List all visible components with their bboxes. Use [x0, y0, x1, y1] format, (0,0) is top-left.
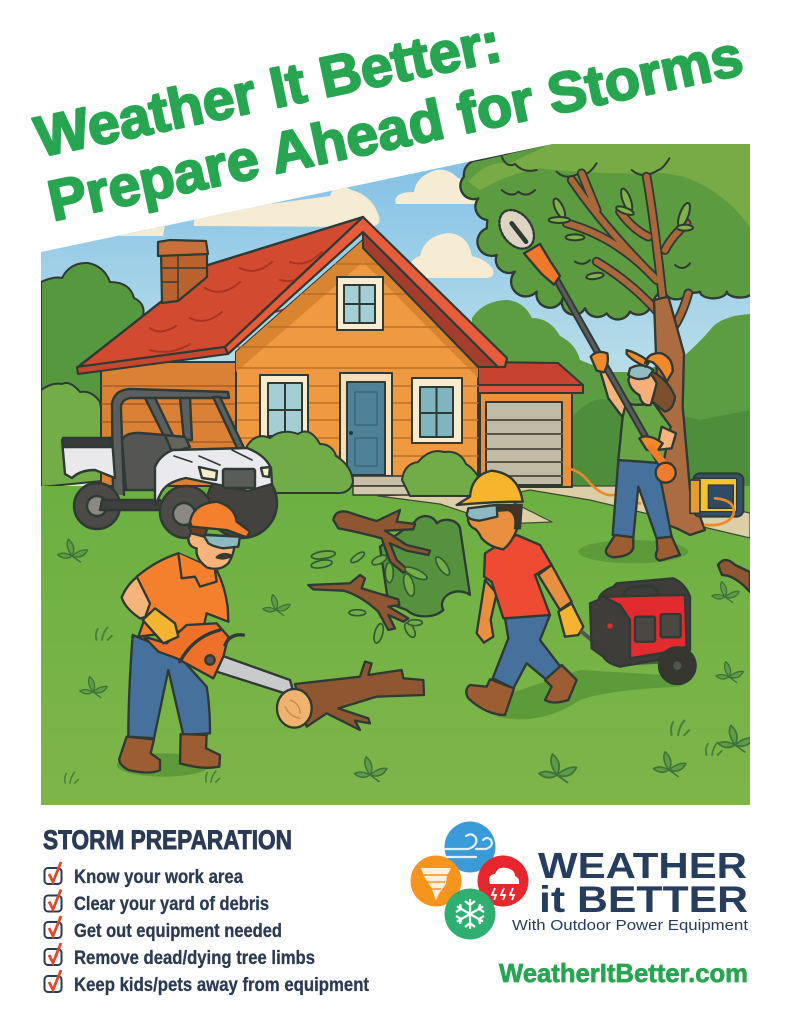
saw pole [557, 280, 663, 468]
bush by door right [402, 451, 482, 496]
face [188, 533, 234, 569]
legs [613, 460, 672, 538]
generator vents [635, 617, 655, 642]
check item 2: Clear your yard of debris [74, 894, 269, 915]
generator body [590, 578, 690, 667]
storm preparation checklist [43, 825, 370, 996]
lawn [41, 486, 750, 806]
check item 3: Get out equipment needed [74, 921, 282, 942]
shirt [618, 403, 671, 463]
hat [627, 350, 673, 382]
collar [178, 553, 217, 587]
check item 3 [44, 916, 282, 942]
icon: snowflake [444, 888, 496, 940]
grille [223, 469, 255, 488]
glove [558, 603, 583, 637]
legs [128, 635, 210, 738]
background bush front left [41, 382, 100, 486]
shirt [137, 553, 228, 637]
bush by door left [247, 432, 353, 493]
face [468, 505, 518, 549]
left window [260, 375, 308, 437]
canopy [460, 137, 753, 319]
far front tire [207, 468, 277, 538]
garage door [486, 402, 562, 485]
chainsaw body [144, 623, 228, 678]
sky [41, 144, 750, 489]
check item 1: Know your work area [74, 867, 243, 888]
headlights [199, 467, 270, 480]
shadow [497, 670, 693, 719]
front wall [236, 240, 478, 486]
hard hat [457, 471, 523, 505]
check item 4: Remove dead/dying tree limbs [74, 948, 315, 969]
mustache [217, 554, 232, 558]
trunk [654, 297, 705, 535]
tree with canopy [460, 137, 753, 535]
generator wheel [659, 647, 696, 684]
check item 4 [44, 943, 315, 969]
goggles [628, 365, 653, 379]
gable red trim [225, 217, 507, 367]
icon: tornado [410, 856, 462, 906]
left arm [477, 580, 497, 643]
check item 5 [44, 970, 370, 996]
background foliage lower [573, 399, 750, 486]
front tire [160, 486, 212, 538]
canopy highlight [468, 144, 750, 228]
icon: wind [444, 822, 496, 872]
UTV vehicle [62, 389, 277, 538]
lower left wall [101, 362, 237, 486]
lower arm [657, 427, 676, 450]
boots [466, 665, 577, 715]
hair [497, 505, 522, 528]
gloves [591, 352, 663, 451]
front door [340, 373, 392, 476]
man with generator [457, 471, 696, 719]
illustration: yard scene [41, 137, 753, 806]
title: Prepare Ahead for Storms [42, 24, 748, 234]
logo wordmark: WEATHER [538, 845, 747, 886]
logo icons [410, 822, 528, 940]
woman with pole saw [492, 203, 688, 563]
check item 1 [44, 862, 243, 888]
shadow [117, 753, 210, 777]
far arm [122, 577, 155, 618]
background bush right of house [472, 300, 750, 420]
upper window [337, 277, 383, 330]
logo wordmark [512, 845, 748, 934]
chainsaw bar [217, 655, 292, 693]
check item 2 [44, 890, 269, 915]
boots [606, 535, 680, 561]
cargo bed [62, 438, 115, 478]
shirt [484, 535, 552, 618]
checklist heading: STORM PREPARATION [43, 825, 292, 855]
right window [412, 378, 462, 443]
hood [155, 448, 272, 505]
goggles [467, 505, 497, 521]
log [295, 662, 424, 730]
raised arm [600, 367, 633, 418]
far generator [567, 468, 743, 525]
tree leaves [549, 187, 693, 280]
fallen branches and cut bush [308, 510, 470, 644]
hair [188, 525, 208, 537]
wall shadow under gable [236, 240, 478, 378]
canopy marks [502, 157, 690, 268]
saw head [492, 203, 541, 255]
front steps [352, 475, 409, 496]
face [628, 368, 657, 405]
logo wordmark: it BETTER [539, 879, 748, 920]
power cord [567, 468, 734, 525]
hair [645, 370, 675, 412]
chimney [158, 240, 208, 303]
roll cage [112, 389, 229, 495]
house [77, 217, 583, 495]
website url: WeatherItBetter.com [499, 958, 748, 988]
boots [119, 734, 220, 772]
glove [143, 608, 178, 643]
clouds [118, 170, 493, 278]
eave [77, 347, 228, 374]
helmet [190, 502, 250, 537]
pole handle [652, 448, 665, 465]
log cut face [277, 689, 312, 728]
generator handle [582, 632, 660, 664]
shadow [578, 540, 688, 563]
rear tire [74, 483, 120, 529]
walkway [378, 486, 750, 538]
branch lower [308, 575, 408, 630]
gable dark trim [363, 232, 498, 367]
legs [493, 615, 562, 688]
branch upper [333, 510, 430, 573]
check item 5: Keep kids/pets away from equipment [74, 975, 370, 996]
garage [478, 362, 583, 487]
branch leaves [311, 550, 452, 644]
far right branch [718, 560, 750, 592]
right arm [538, 565, 572, 610]
background bush left [41, 262, 145, 400]
icon: storm cloud [478, 856, 528, 906]
man with chainsaw [117, 502, 424, 777]
lawn leaves and tufts [58, 539, 753, 783]
cut bush [380, 516, 470, 616]
main roof [78, 217, 363, 367]
goggles [203, 535, 240, 548]
seat and frame [122, 433, 172, 490]
title: Weather It Better: [30, 10, 507, 170]
branches [567, 173, 688, 330]
logo wordmark: With Outdoor Power Equipment [512, 918, 748, 934]
